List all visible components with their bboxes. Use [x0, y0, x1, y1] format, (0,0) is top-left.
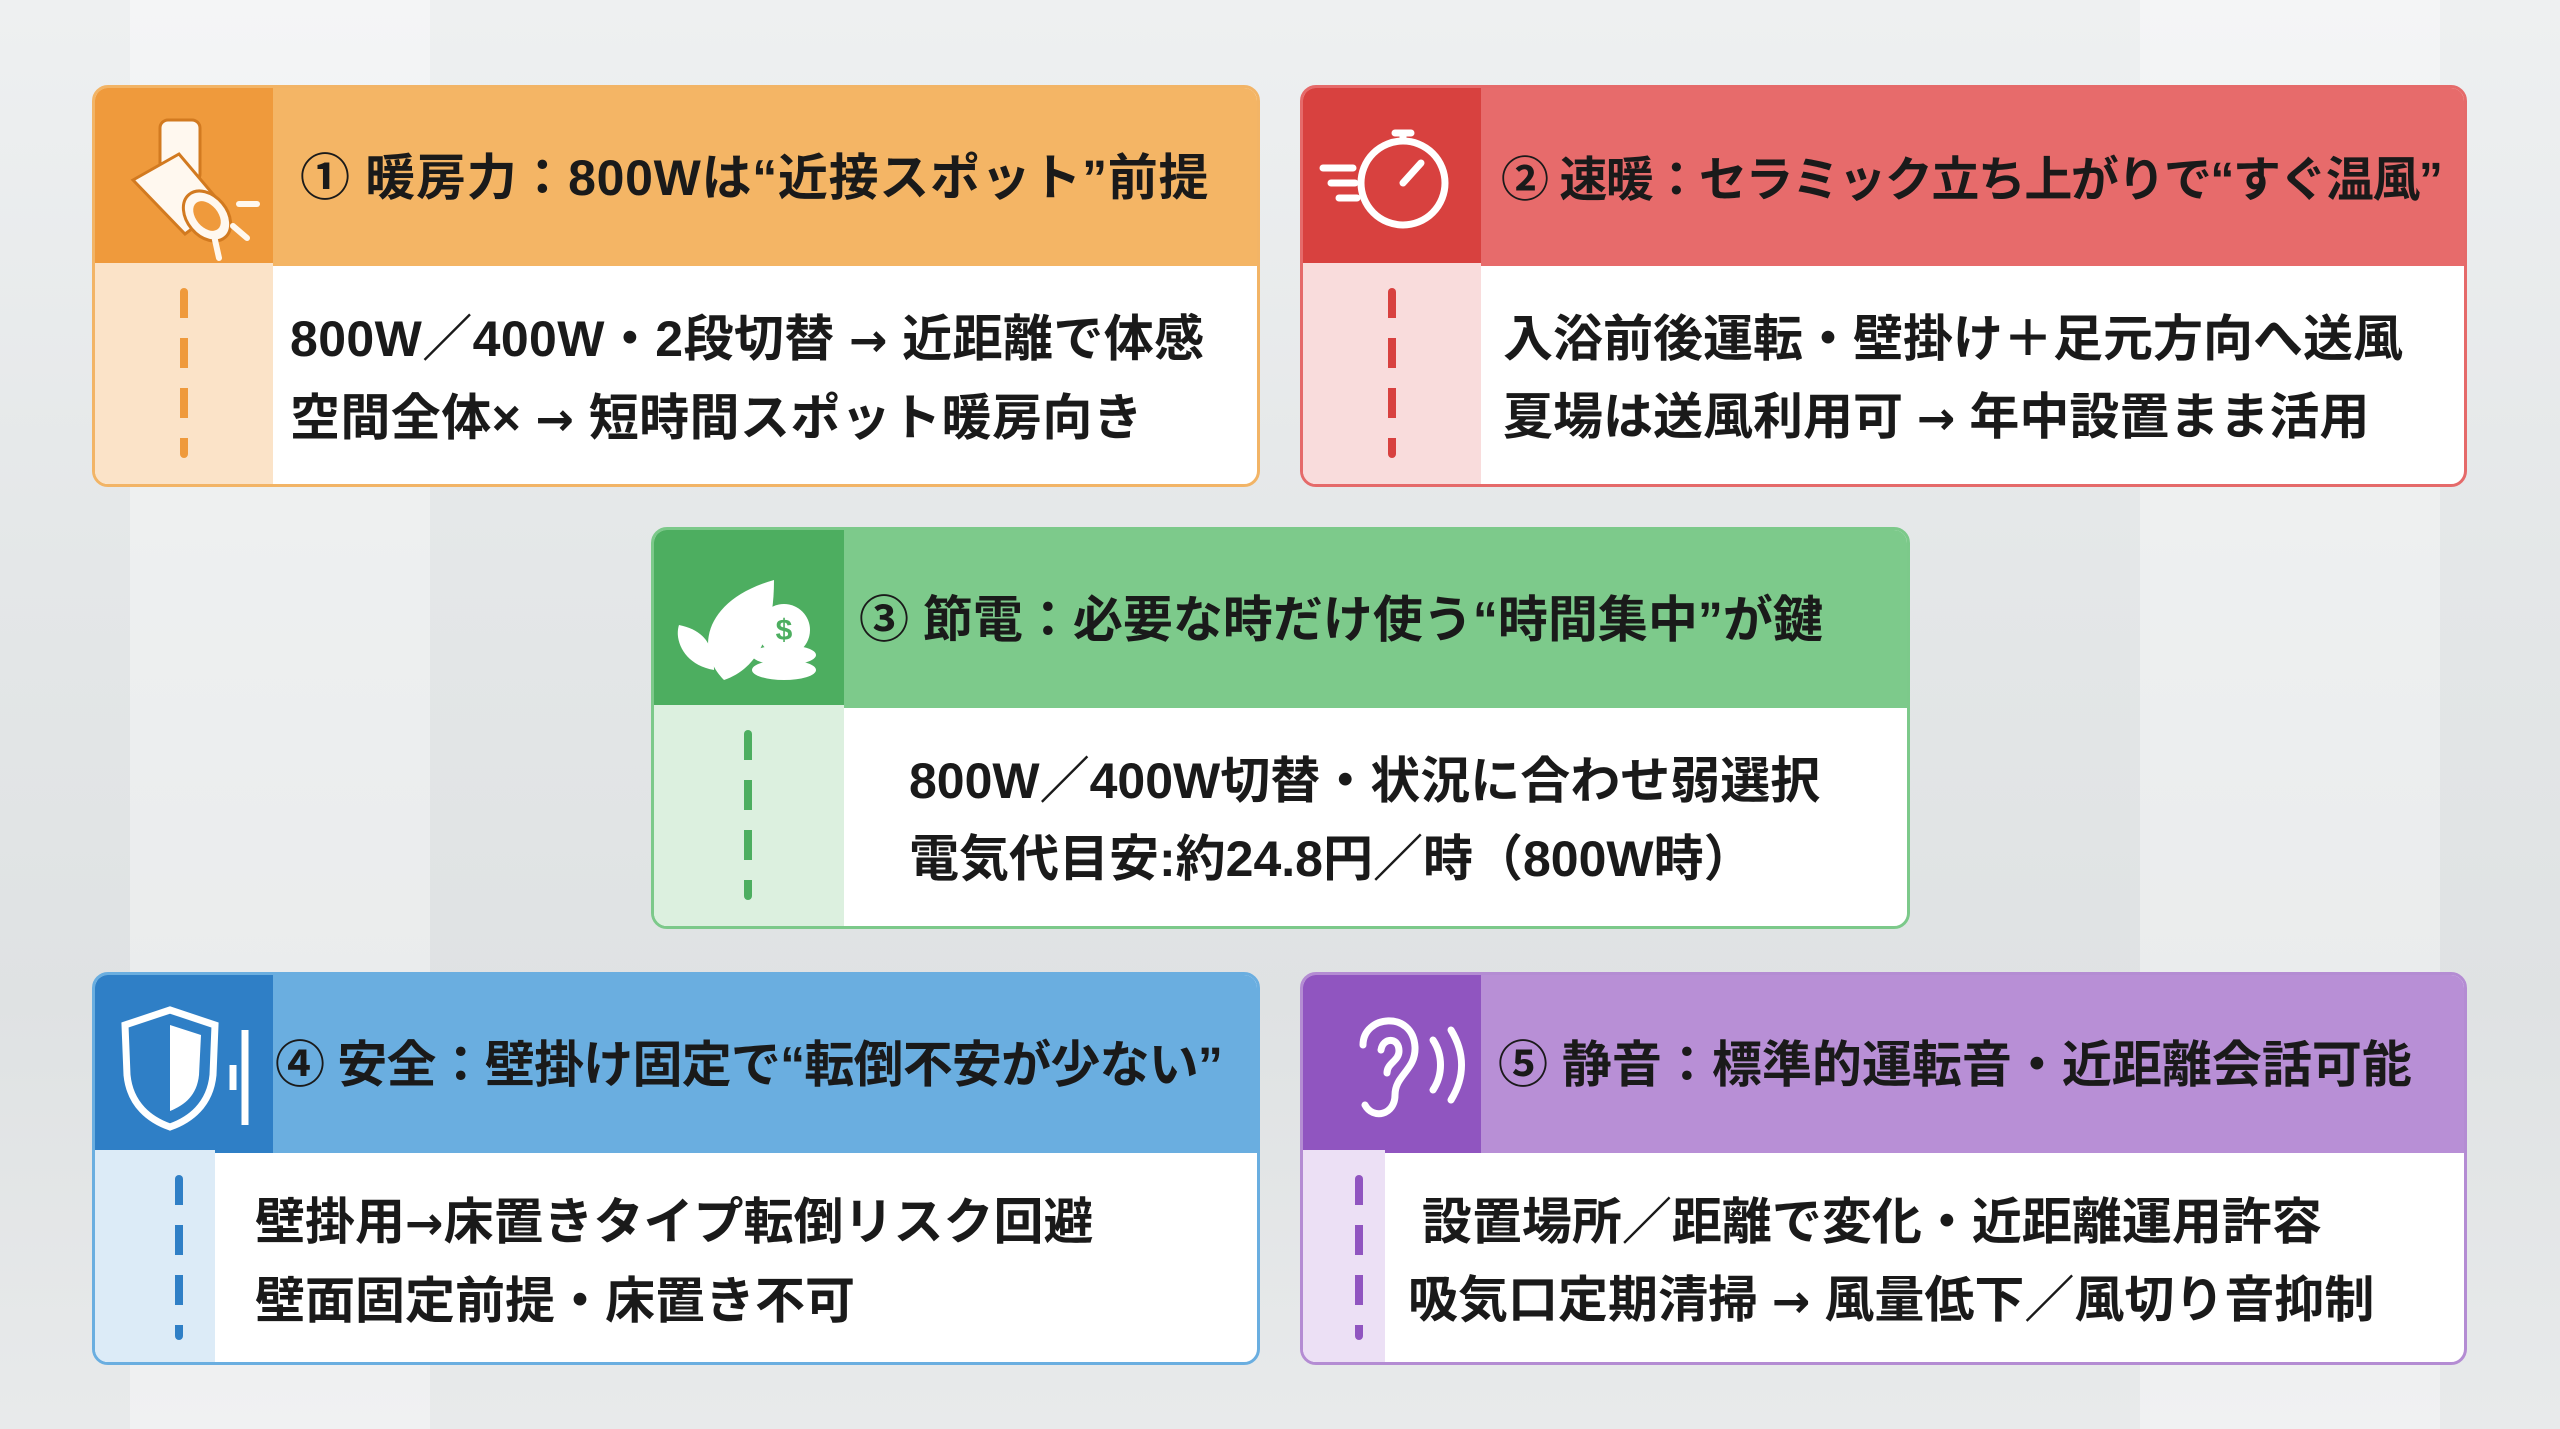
- body text: 800W／400W切替・状況に合わせ弱選択: [909, 753, 1820, 809]
- panel: quick heating: [1300, 85, 2467, 487]
- icon: shield: [95, 975, 273, 1153]
- body strip: [1303, 1150, 1385, 1362]
- body text: [1503, 311, 2403, 445]
- heading: ⑤ 静音：標準的運転音・近距離会話可能: [1498, 1037, 2412, 1093]
- panel: quietness: [1300, 972, 2467, 1365]
- body text: 設置場所／距離で変化・近距離運用許容: [1422, 1194, 2322, 1250]
- header bar: [95, 975, 1257, 1153]
- body text: [255, 1194, 1094, 1329]
- body text: 電気代目安:約24.8円／時（800W時）: [909, 831, 1754, 887]
- icon: stopwatch: [1303, 88, 1481, 266]
- panel: safety: [92, 972, 1260, 1365]
- body strip: [654, 705, 844, 926]
- body text: 入浴前後運転・壁掛け＋足元方向へ送風: [1503, 311, 2403, 367]
- icon: ear: [1303, 975, 1481, 1153]
- header bar: [1303, 975, 2464, 1153]
- body text: [290, 311, 1205, 446]
- heading: ② 速暖：セラミック立ち上がりで“すぐ温風”: [1501, 154, 2441, 207]
- heading: ① 暖房力：800Wは“近接スポット”前提: [300, 150, 1209, 206]
- header bar: [95, 88, 1257, 266]
- body text: 空間全体× → 短時間スポット暖房向き: [290, 390, 1143, 446]
- body text: 壁面固定前提・床置き不可: [255, 1273, 855, 1329]
- body text: [1408, 1194, 2374, 1328]
- panel: heating power: [92, 85, 1260, 487]
- body text: [909, 753, 1820, 887]
- icon: leaf and coins: $: [776, 614, 793, 647]
- body strip: [95, 263, 273, 484]
- heading: ④ 安全：壁掛け固定で“転倒不安が少ない”: [275, 1037, 1222, 1093]
- header bar: [1303, 88, 2464, 266]
- body strip: [1303, 263, 1481, 484]
- body strip: [95, 1150, 215, 1362]
- heading: ③ 節電：必要な時だけ使う“時間集中”が鍵: [859, 592, 1823, 648]
- header bar: [654, 530, 1907, 708]
- body text: 吸気口定期清掃 → 風量低下／風切り音抑制: [1408, 1272, 2374, 1328]
- panel: power saving: [651, 527, 1910, 929]
- icon: leaf and coins: [654, 530, 844, 708]
- body text: 800W／400W・2段切替 → 近距離で体感: [290, 311, 1205, 367]
- icon: spotlight: [95, 88, 273, 266]
- body text: 夏場は送風利用可 → 年中設置まま活用: [1503, 389, 2369, 445]
- body text: 壁掛用→床置きタイプ転倒リスク回避: [255, 1194, 1094, 1250]
